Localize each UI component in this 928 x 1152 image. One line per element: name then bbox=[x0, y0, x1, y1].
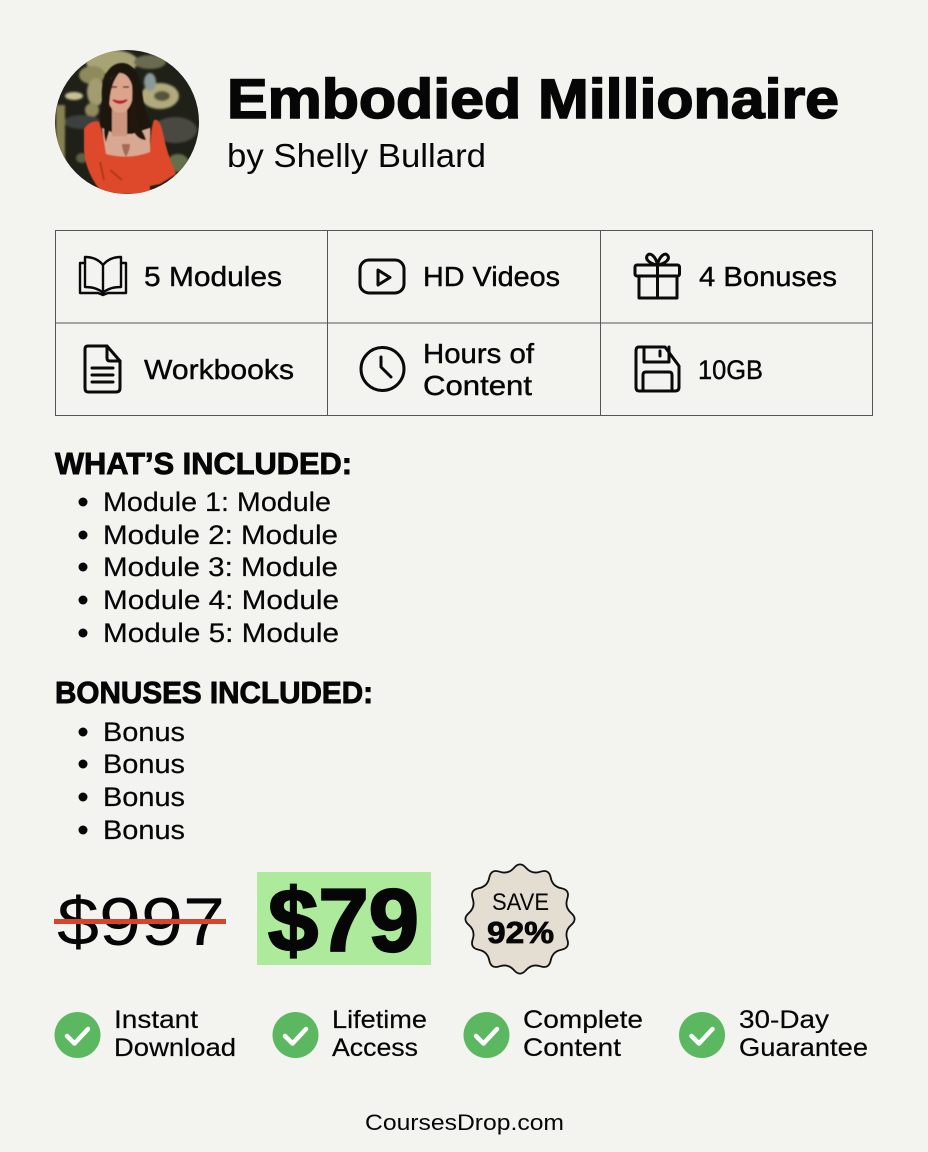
hair back bbox=[101, 63, 153, 141]
icon: gift box bbox=[635, 254, 680, 298]
icon: open book bbox=[80, 257, 126, 295]
bonus list bbox=[78, 717, 185, 845]
label: Hours of Content bbox=[423, 338, 534, 401]
label: Workbooks: Workbooks bbox=[144, 354, 294, 385]
savings badge bbox=[465, 864, 575, 974]
bonus list: Bonus bbox=[103, 782, 185, 812]
bonus list: Bonus bbox=[103, 717, 185, 747]
module list bbox=[78, 487, 339, 648]
module list: Module 3: Module bbox=[103, 552, 338, 582]
hair front bbox=[104, 72, 120, 142]
guarantee: instant download bbox=[54, 1006, 236, 1062]
sale price: $79 bbox=[268, 870, 419, 970]
bonus list: Bonus bbox=[103, 815, 185, 845]
author portrait photo bbox=[55, 50, 199, 194]
guarantee: 30-day: Guarantee bbox=[739, 1034, 868, 1062]
module list: Module 2: Module bbox=[103, 520, 338, 550]
label: 4 Bonuses: 4 Bonuses bbox=[699, 261, 837, 292]
chest bbox=[102, 128, 150, 157]
guarantee: lifetime access: Lifetime bbox=[332, 1006, 427, 1034]
guarantee: 30-day: 30-Day bbox=[739, 1006, 830, 1034]
heading: bonuses included: BONUSES INCLUDED: bbox=[55, 675, 373, 710]
dress bbox=[84, 120, 176, 194]
feature grid bbox=[56, 230, 872, 416]
module list: Module 5: Module bbox=[103, 618, 339, 648]
guarantee: complete content bbox=[464, 1006, 643, 1062]
dress shadow bbox=[100, 162, 122, 180]
footer source: CoursesDrop.com bbox=[365, 1110, 564, 1135]
guarantee: lifetime access bbox=[272, 1006, 427, 1062]
guarantee: lifetime access: Access bbox=[332, 1034, 418, 1062]
label: Hours of Content: Content bbox=[423, 370, 532, 401]
label: 5 Modules: 5 Modules bbox=[144, 261, 282, 292]
label: HD Videos: HD Videos bbox=[423, 261, 560, 292]
guarantee: 30-day bbox=[679, 1006, 868, 1062]
neck and face bbox=[112, 108, 127, 136]
icon: document bbox=[85, 346, 120, 392]
icon: floppy disk bbox=[636, 347, 679, 391]
savings badge: 92% bbox=[487, 915, 554, 950]
guarantee: complete content: Content bbox=[523, 1034, 621, 1062]
bonus list: Bonus bbox=[103, 749, 185, 779]
module list: Module 1: Module bbox=[103, 487, 331, 517]
guarantee: complete content: Complete bbox=[523, 1006, 643, 1034]
title: Embodied Millionaire bbox=[227, 67, 839, 130]
savings badge: SAVE bbox=[492, 889, 549, 916]
module list: Module 4: Module bbox=[103, 585, 339, 615]
label: Hours of Content: Hours of bbox=[423, 338, 534, 369]
guarantee: instant download: Instant bbox=[114, 1006, 198, 1034]
heading: what's included: WHAT’S INCLUDED: bbox=[55, 446, 352, 481]
byline: by Shelly Bullard bbox=[227, 137, 486, 174]
guarantee: instant download: Download bbox=[114, 1034, 236, 1062]
old price struck through: $997 bbox=[57, 884, 225, 960]
label: 10GB: 10GB bbox=[698, 355, 763, 385]
icon: clock bbox=[361, 348, 404, 390]
icon: video play bbox=[360, 260, 404, 293]
